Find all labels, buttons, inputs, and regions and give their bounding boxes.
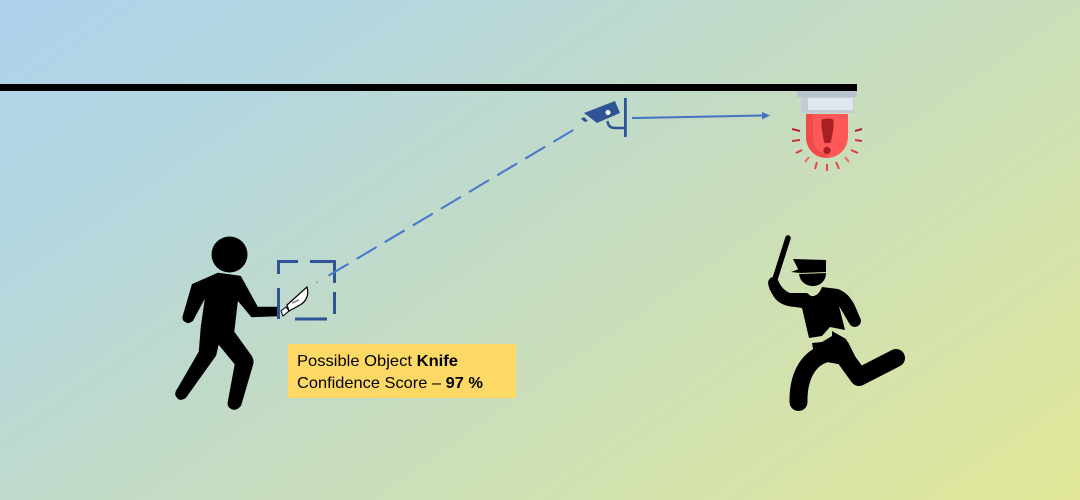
raised arm and torso	[768, 277, 861, 338]
arrow camera to alarm	[632, 112, 770, 120]
ceiling line	[0, 84, 857, 91]
front leg	[798, 354, 824, 402]
body	[176, 274, 278, 409]
label text line 1: Possible Object Knife	[297, 353, 458, 370]
icon: security camera	[581, 98, 627, 137]
head	[212, 236, 248, 272]
cap	[793, 259, 826, 273]
label box	[288, 344, 516, 398]
icon: person with knife	[176, 236, 278, 409]
icon: knife	[281, 287, 308, 316]
hips	[812, 336, 856, 364]
detection box	[278, 262, 334, 319]
baton	[775, 238, 788, 279]
head	[799, 273, 826, 286]
holster	[832, 331, 848, 343]
icon: running police officer	[768, 238, 896, 402]
icon: alarm siren	[792, 91, 862, 171]
label text line 2: Confidence Score – 97 %	[297, 375, 483, 392]
dashed detection line	[316, 130, 573, 283]
back leg	[838, 348, 896, 377]
